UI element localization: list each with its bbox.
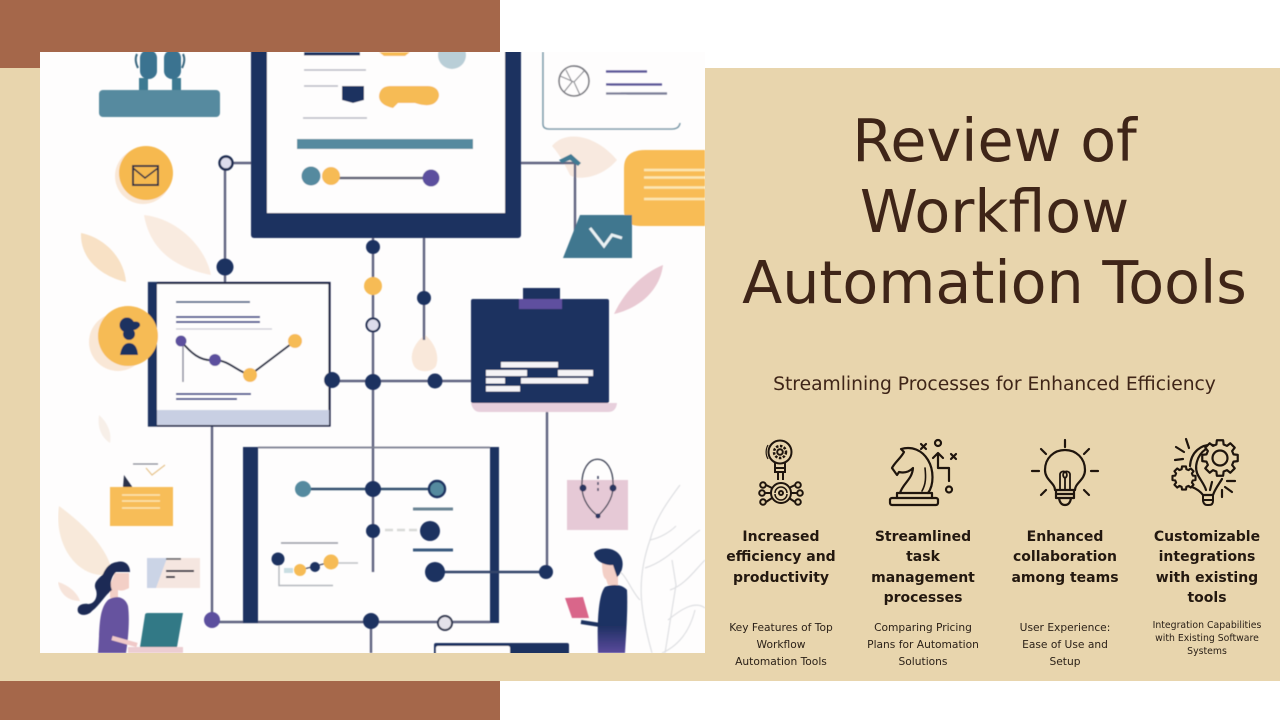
heading: column 3: collaboration <box>1013 549 1117 565</box>
caption: column 4: with Existing Software <box>1155 633 1259 644</box>
icon: chess knight strategy <box>888 438 958 506</box>
icon: bulb with gears <box>1171 438 1239 506</box>
icon: bulb with gear and network <box>758 440 804 506</box>
clipboard panel <box>471 288 617 412</box>
top brown bar <box>0 0 500 52</box>
heading: column 4: Customizable <box>1154 529 1260 545</box>
caption: column 4: Integration Capabilities <box>1153 620 1261 631</box>
monitor panel <box>251 40 521 238</box>
heading: column 3 <box>1011 529 1119 586</box>
yellow message bubble <box>624 150 705 226</box>
caption: column 1: Workflow <box>757 638 805 651</box>
heading: column 1: efficiency and <box>726 549 836 565</box>
bottom tab <box>433 642 570 653</box>
caption: column 3: Setup <box>1049 655 1081 668</box>
caption: column 4: Systems <box>1187 646 1227 657</box>
title: Workflow <box>860 178 1129 246</box>
caption: column 2: Solutions <box>899 655 947 668</box>
title <box>742 107 1247 317</box>
decorative leaves <box>58 137 663 601</box>
man with tablet <box>565 548 627 653</box>
small note card <box>147 558 200 588</box>
line chart card <box>148 282 330 426</box>
caption: column 2: Plans for Automation <box>867 638 979 651</box>
icon: light bulb <box>1030 438 1100 506</box>
caption: column 1 <box>729 621 833 668</box>
title: Automation Tools <box>742 249 1247 317</box>
illustration: workflow automation network <box>0 0 705 653</box>
network nodes <box>204 156 553 630</box>
heading: column 1: productivity <box>733 570 829 586</box>
caption: column 1: Key Features of Top <box>729 621 833 634</box>
pink tag with necklace <box>567 459 628 530</box>
heading: column 4: with existing <box>1156 570 1258 586</box>
title: Review of <box>852 107 1137 175</box>
avatar badge <box>89 306 158 371</box>
microphones on teal bar <box>99 50 220 117</box>
heading: column 1 <box>726 529 836 586</box>
bottom brown bar <box>0 681 500 720</box>
heading: column 2: processes <box>884 590 962 606</box>
process card <box>243 447 547 623</box>
plant outline <box>615 485 705 653</box>
globe card <box>543 52 680 129</box>
caption: column 4 <box>1153 620 1261 657</box>
heading: column 3: among teams <box>1011 570 1119 586</box>
heading: column 2 <box>871 529 975 606</box>
heading: column 1: Increased <box>742 529 820 545</box>
yellow document <box>110 464 173 526</box>
caption: column 2 <box>867 621 979 668</box>
heading: column 4: tools <box>1187 590 1227 606</box>
icon: envelope badge <box>115 146 173 204</box>
connector lines <box>212 163 575 653</box>
heading: column 2: management <box>871 570 975 586</box>
heading: column 3: Enhanced <box>1027 529 1103 545</box>
top-left brown block edge <box>0 52 40 68</box>
subtitle: Streamlining Processes for Enhanced Efficiency <box>773 374 1216 395</box>
heading: column 2: Streamlined <box>875 529 971 545</box>
caption: column 1: Automation Tools <box>735 655 827 668</box>
caption: column 3: Ease of Use and <box>1022 638 1108 651</box>
heading: column 2: task <box>906 549 940 565</box>
caption: column 3 <box>1020 621 1110 668</box>
teal chart tile <box>559 154 632 258</box>
heading: column 4: integrations <box>1159 549 1255 565</box>
woman with laptop <box>78 562 183 653</box>
heading: column 4 <box>1154 529 1260 606</box>
caption: column 2: Comparing Pricing <box>874 621 972 634</box>
caption: column 3: User Experience: <box>1020 621 1110 634</box>
